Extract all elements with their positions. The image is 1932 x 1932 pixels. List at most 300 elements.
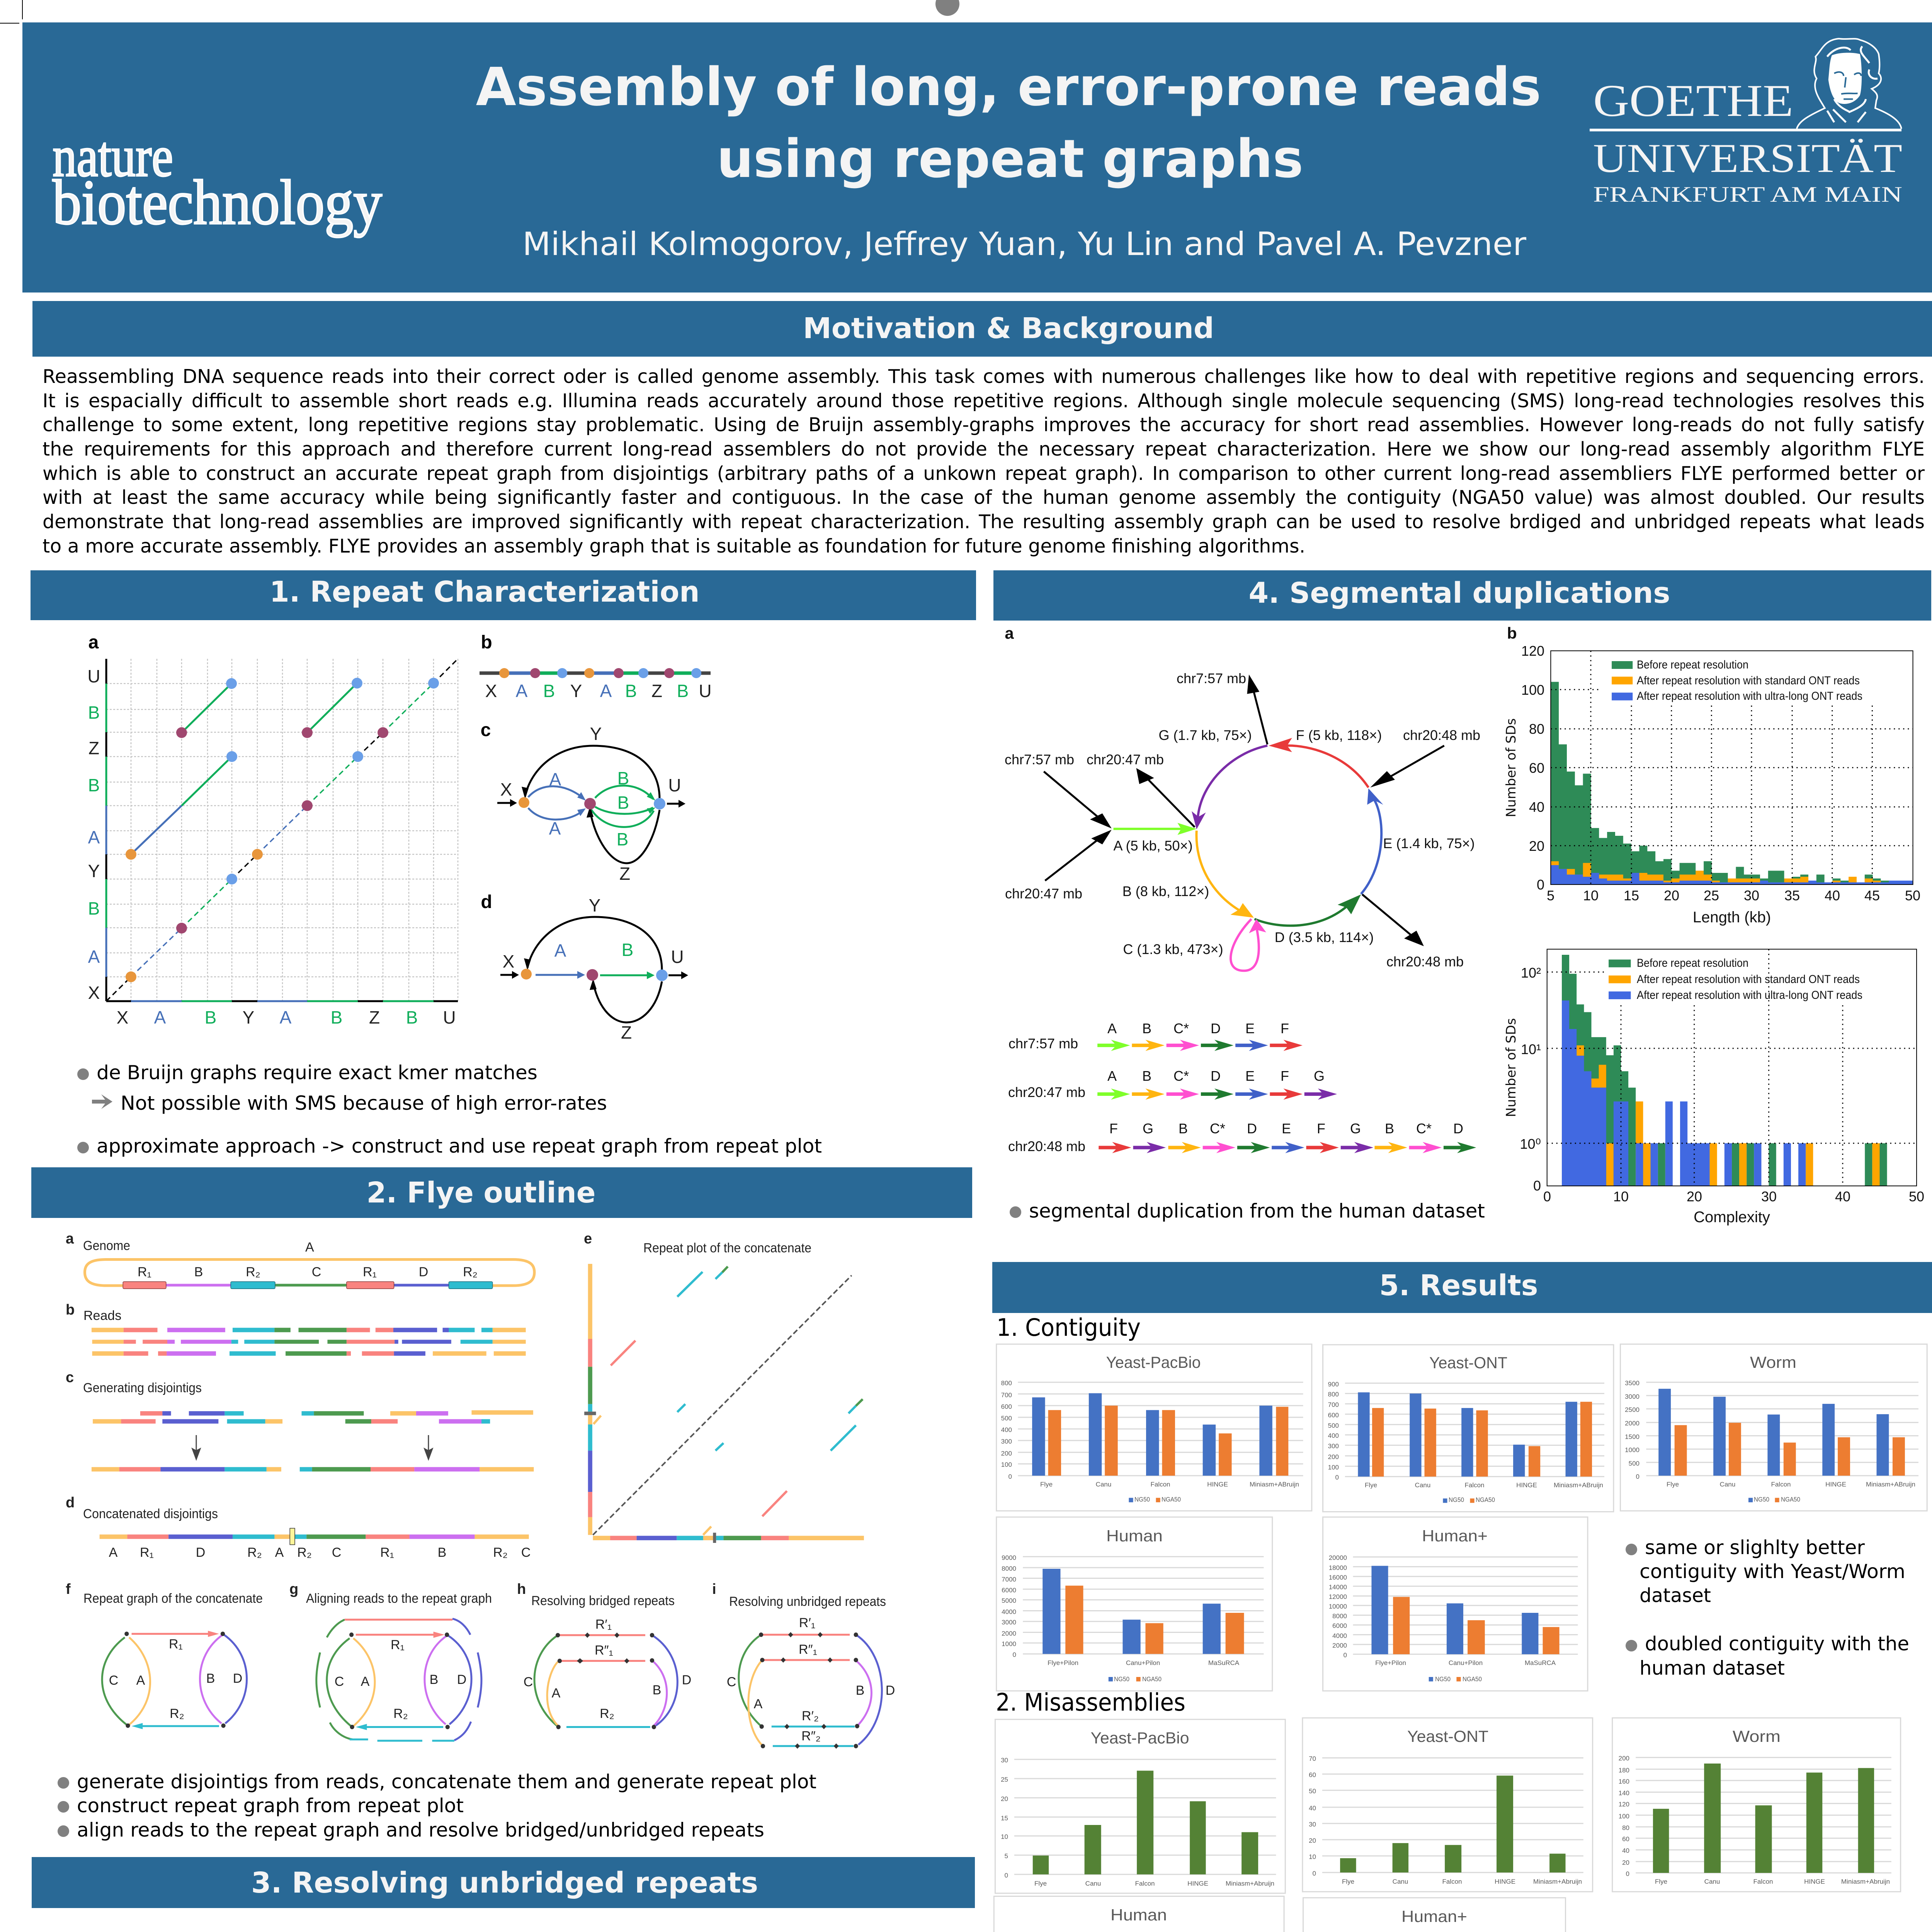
chart: contiguity yeast-pacbio: NGA50: [1162, 1496, 1181, 1503]
diagram: repeat graph c: B: [617, 829, 628, 849]
diagram: segmental duplication circle a: B: [1142, 1068, 1151, 1084]
diagram: segmental duplication circle a: E: [1245, 1068, 1255, 1084]
chart: contiguity human plus: Human+: [1422, 1527, 1488, 1545]
chart: contiguity human plus: 14000: [1329, 1583, 1347, 1591]
chart: misassemblies yeast-ont: 70: [1309, 1755, 1316, 1762]
chart: histogram length: 35: [1784, 888, 1800, 903]
chart: repeat plot a: Z: [369, 1007, 380, 1027]
panel: 5. results: [992, 1262, 1932, 1932]
diagram: genome, reads, disjointigs: R₂: [247, 1545, 262, 1560]
chart: histogram length: 10: [1583, 888, 1599, 903]
chart: misassemblies yeast-ont: Falcon: [1442, 1878, 1462, 1885]
diagram: linear genome b: Y: [570, 681, 582, 701]
chart: contiguity human plus: 12000: [1329, 1593, 1347, 1600]
diagram: genome, reads, disjointigs: R₂: [463, 1265, 478, 1279]
subheading: misassemblies: 2. Misassemblies: [996, 1688, 1185, 1716]
diagram: repeat graph d: [481, 892, 688, 1043]
diagram: genome, reads, disjointigs: c: [66, 1369, 74, 1386]
logo: Goethe Universitaet: [1590, 39, 1902, 207]
text block: to a more accurate assembly. FLYE provides an assembly graph that is suitable as foundation for future genome finishing algorithms.: [43, 535, 1305, 557]
chart: contiguity yeast-ont: 500: [1328, 1422, 1339, 1429]
chart: contiguity worm: 3500: [1625, 1379, 1639, 1387]
diagram: segmental duplication circle a: F: [1281, 1020, 1289, 1036]
chart: misassemblies worm: Flye: [1655, 1878, 1667, 1885]
chart: contiguity yeast-pacbio: Miniasm+ABruijn: [1250, 1481, 1299, 1488]
chart: histogram complexity: Complexity: [1694, 1209, 1770, 1226]
diagram: genome, reads, disjointigs: b: [66, 1302, 75, 1318]
chart: misassemblies yeast-pacbio: 10: [1001, 1833, 1008, 1840]
chart: contiguity yeast-pacbio: Falcon: [1150, 1481, 1170, 1488]
diagram: segmental duplication circle a: D (3.5 kb, 114×): [1275, 929, 1374, 945]
chart: misassemblies yeast-ont: 30: [1309, 1821, 1316, 1828]
diagram: alignment graph g: A: [361, 1674, 370, 1689]
bullets: contiguity: doubled contiguity with the: [1645, 1633, 1909, 1655]
chart: contiguity yeast-pacbio: Canu: [1096, 1481, 1111, 1488]
chart: repeat plot a: A: [280, 1007, 292, 1027]
diagram: repeat graph c: B: [617, 768, 629, 788]
diagram: unbridged repeats i: i: [712, 1581, 716, 1597]
diagram: alignment graph g: R₁: [391, 1638, 405, 1652]
chart: contiguity human plus: Flye+Pilon: [1375, 1659, 1406, 1667]
diagram: linear genome b: [480, 632, 712, 701]
diagram: repeat graph f: R₁: [169, 1637, 183, 1651]
diagram: unbridged repeats i: C: [727, 1675, 736, 1689]
chart: repeat plot a: Y: [243, 1007, 254, 1027]
chart: misassemblies worm: 180: [1619, 1767, 1629, 1774]
chart: histogram length: 0: [1537, 877, 1544, 893]
chart: misassemblies yeast-pacbio: 30: [1001, 1757, 1008, 1764]
chart: contiguity yeast-pacbio: 700: [1001, 1391, 1012, 1399]
diagram: unbridged repeats i: B: [856, 1683, 864, 1698]
chart: misassemblies worm: 60: [1622, 1835, 1629, 1843]
chart: contiguity yeast-ont: NGA50: [1476, 1496, 1495, 1503]
chart: repeat plot a: X: [117, 1007, 128, 1027]
chart: histogram complexity: 40: [1835, 1189, 1850, 1204]
chart: histogram length: 80: [1529, 721, 1544, 737]
diagram: linear genome b: B: [625, 681, 637, 701]
heading: 4. Segmental duplications: [1249, 577, 1670, 610]
diagram: repeat graph d: B: [622, 940, 633, 960]
chart: contiguity yeast-pacbio: 300: [1001, 1438, 1012, 1445]
diagram: unbridged repeats i: R′₁: [799, 1616, 815, 1630]
chart: contiguity human plus: 2000: [1332, 1642, 1347, 1649]
chart: contiguity yeast-ont: [1323, 1345, 1614, 1512]
diagram: segmental duplication circle a: chr20:47 mb: [1005, 886, 1082, 901]
diagram: genome, reads, disjointigs: R₁: [363, 1265, 377, 1279]
chart: histogram length: 40: [1825, 888, 1840, 903]
diagram: repeat graph f: A: [136, 1673, 145, 1688]
text block: [43, 365, 1925, 562]
bullets: Not possible with SMS because of high error-rates: [121, 1092, 607, 1114]
diagram: segmental duplication circle a: G: [1143, 1121, 1153, 1136]
chart: misassemblies worm: 160: [1619, 1778, 1629, 1785]
diagram: unbridged repeats i: R″₂: [801, 1729, 821, 1743]
chart: contiguity worm: 1000: [1625, 1446, 1639, 1454]
diagram: bridged repeats h: A: [552, 1686, 561, 1701]
chart: contiguity human plus: [1323, 1517, 1588, 1691]
chart: histogram complexity: 10¹: [1521, 1041, 1541, 1057]
diagram: repeat graph f: f: [66, 1581, 71, 1597]
diagram: repeat graph f: [66, 1581, 263, 1729]
bullets: [77, 1061, 822, 1157]
diagram: segmental duplication circle a: C*: [1173, 1020, 1189, 1036]
chart: histogram complexity: After repeat resolution with ultra-long ONT reads: [1637, 989, 1862, 1002]
chart: misassemblies worm: 40: [1622, 1847, 1629, 1854]
chart: repeat plot a: B: [406, 1007, 418, 1027]
chart: contiguity worm: NG50: [1754, 1496, 1769, 1503]
diagram: genome, reads, disjointigs: C: [332, 1545, 341, 1560]
panel: motivation and background: [32, 301, 1932, 562]
chart: misassemblies worm: 80: [1622, 1824, 1629, 1832]
chart: repeat plot a: B: [331, 1007, 342, 1027]
chart: contiguity yeast-pacbio: 100: [1001, 1461, 1012, 1468]
chart: repeat plot a: B: [88, 898, 100, 918]
chart: misassemblies human plus: Human+: [1401, 1907, 1467, 1925]
diagram: segmental duplication circle a: C*: [1210, 1121, 1225, 1136]
diagram: linear genome b: B: [677, 681, 689, 701]
diagram: unbridged repeats i: R″₁: [799, 1642, 817, 1657]
text block: the requirements for this approach and therefore current long-read assemblers do not provide the necessary repeat characterization. Here we show our long-read assembly algorithm FLYE: [43, 438, 1925, 460]
chart: misassemblies worm: 200: [1619, 1755, 1629, 1762]
chart: contiguity human: [997, 1517, 1272, 1691]
chart: histogram length: 120: [1521, 643, 1544, 659]
chart: repeat plot a: a: [88, 632, 99, 653]
chart: histogram length: b: [1507, 624, 1517, 642]
chart: histogram length: Number of SDs: [1503, 718, 1519, 817]
diagram: genome, reads, disjointigs: Concatenated disjointigs: [83, 1507, 218, 1521]
chart: contiguity worm: 2000: [1625, 1420, 1639, 1427]
diagram: linear genome b: U: [699, 681, 712, 701]
diagram: bridged repeats h: h: [517, 1581, 526, 1597]
diagram: bridged repeats h: B: [653, 1683, 661, 1697]
chart: contiguity human plus: 20000: [1329, 1554, 1347, 1561]
diagram: genome, reads, disjointigs: Reads: [83, 1308, 121, 1323]
header band: [22, 22, 1932, 293]
chart: contiguity human: 0: [1013, 1651, 1016, 1658]
diagram: segmental duplication circle a: A (5 kb, 50×): [1113, 838, 1193, 854]
chart: misassemblies yeast-ont: 60: [1309, 1771, 1316, 1779]
diagram: repeat graph c: X: [500, 779, 512, 799]
diagram: unbridged repeats i: D: [886, 1683, 895, 1698]
diagram: alignment graph g: Aligning reads to the repeat graph: [306, 1591, 492, 1606]
chart: contiguity yeast-ont: 800: [1328, 1391, 1339, 1398]
logo: Goethe Universitaet: GOETHE: [1593, 75, 1793, 126]
diagram: segmental duplication circle a: A: [1107, 1020, 1117, 1036]
chart: repeat plot a: U: [443, 1007, 456, 1027]
diagram: segmental duplication circle a: E (1.4 kb, 75×): [1383, 835, 1475, 851]
bullets: contiguity: human dataset: [1639, 1657, 1785, 1679]
chart: repeat plot e: [584, 1231, 864, 1543]
text block: It is espacially difficult to assemble short reads e.g. Illumina reads accurately around those repetitive regions. Although single molecule sequencing (SMS) long-read technologies resolves this: [43, 390, 1925, 412]
title: using repeat graphs: [717, 129, 1303, 190]
diagram: genome, reads, disjointigs: B: [438, 1545, 446, 1560]
diagram: repeat graph c: Z: [619, 864, 630, 884]
chart: contiguity human plus: 10000: [1329, 1603, 1347, 1610]
text block: demonstrate that long-read assemblies are improved significantly with repeat characterization. The resulting assembly graph can be used to resolve brdiged and unbridged repeats what leads: [43, 511, 1925, 533]
chart: contiguity human plus: NGA50: [1463, 1675, 1482, 1683]
diagram: bridged repeats h: Resolving bridged repeats: [531, 1594, 675, 1608]
chart: misassemblies yeast-ont: 40: [1309, 1804, 1316, 1812]
chart: contiguity human: 3000: [1002, 1619, 1016, 1626]
chart: contiguity yeast-pacbio: 400: [1001, 1426, 1012, 1434]
chart: misassemblies yeast-ont: Miniasm+Abruijn: [1533, 1878, 1582, 1885]
chart: repeat plot e: Repeat plot of the concatenate: [643, 1241, 811, 1255]
diagram: segmental duplication circle a: D: [1211, 1068, 1221, 1084]
diagram: repeat graph c: Y: [590, 724, 602, 744]
chart: contiguity worm: Canu: [1720, 1481, 1735, 1488]
diagram: linear genome b: A: [516, 681, 528, 701]
diagram: unbridged repeats i: R′₂: [802, 1709, 819, 1723]
chart: contiguity worm: Miniasm+ABruijn: [1866, 1481, 1915, 1488]
chart: histogram length: 15: [1624, 888, 1639, 903]
logo: nature biotechnology: [53, 124, 382, 238]
chart: repeat plot a: A: [154, 1007, 166, 1027]
chart: contiguity yeast-pacbio: NG50: [1134, 1496, 1150, 1503]
chart: misassemblies yeast-ont: 0: [1313, 1870, 1316, 1877]
chart: contiguity human plus: 8000: [1332, 1612, 1347, 1620]
chart: contiguity human: 1000: [1002, 1640, 1016, 1648]
diagram: genome, reads, disjointigs: C: [312, 1265, 321, 1279]
chart: histogram complexity: 10²: [1521, 965, 1541, 981]
chart: contiguity human: Human: [1106, 1527, 1163, 1545]
chart: contiguity yeast-ont: 100: [1328, 1464, 1339, 1471]
diagram: segmental duplication circle a: D: [1211, 1020, 1221, 1036]
chart: misassemblies yeast-pacbio: Falcon: [1135, 1880, 1155, 1887]
panel: 4. segmental duplications: [993, 570, 1931, 1226]
chart: contiguity human: 6000: [1002, 1587, 1016, 1594]
chart: contiguity yeast-pacbio: 800: [1001, 1379, 1012, 1387]
diagram: unbridged repeats i: Resolving unbridged repeats: [729, 1594, 886, 1609]
authors: Mikhail Kolmogorov, Jeffrey Yuan, Yu Lin and Pavel A. Pevzner: [522, 225, 1527, 263]
chart: histogram length: 25: [1704, 888, 1719, 903]
diagram: segmental duplication circle a: E: [1245, 1020, 1255, 1036]
bullets: contiguity: same or slighlty better: [1645, 1536, 1865, 1559]
chart: contiguity yeast-ont: Yeast-ONT: [1429, 1354, 1507, 1372]
bullets: construct repeat graph from repeat plot: [77, 1794, 464, 1817]
chart: misassemblies yeast-pacbio: 0: [1005, 1872, 1008, 1879]
diagram: segmental duplication circle a: chr20:48 mb: [1008, 1138, 1085, 1154]
diagram: bridged repeats h: [517, 1581, 691, 1729]
diagram: genome, reads, disjointigs: R₁: [140, 1545, 154, 1560]
diagram: genome, reads, disjointigs: R₂: [493, 1545, 508, 1560]
text block: with at least the same accuracy while being significantly faster and contiguous. In the case of the human genome assembly the contiguity (NGA50 value) was almost doubled. Our results: [43, 486, 1925, 509]
chart: histogram complexity: [1503, 949, 1924, 1226]
diagram: genome, reads, disjointigs: D: [196, 1545, 205, 1560]
diagram: repeat graph d: Y: [589, 895, 600, 915]
chart: contiguity human plus: 6000: [1332, 1622, 1347, 1629]
chart: misassemblies worm: 20: [1622, 1859, 1629, 1866]
diagram: alignment graph g: [289, 1581, 492, 1741]
chart: misassemblies worm: Worm: [1733, 1727, 1781, 1745]
diagram: genome, reads, disjointigs: R₂: [297, 1545, 312, 1560]
chart: repeat plot a: U: [87, 666, 100, 686]
chart: repeat plot a: A: [88, 827, 100, 847]
diagram: segmental duplication circle a: chr7:57 mb: [1177, 670, 1246, 686]
chart: contiguity yeast-pacbio: 200: [1001, 1450, 1012, 1457]
diagram: genome, reads, disjointigs: D: [419, 1265, 428, 1279]
diagram: repeat graph c: c: [481, 720, 491, 740]
chart: histogram complexity: Before repeat resolution: [1637, 957, 1748, 969]
diagram: genome, reads, disjointigs: Genome: [83, 1238, 130, 1253]
diagram: segmental duplication circle a: G: [1350, 1121, 1361, 1136]
chart: histogram complexity: 30: [1761, 1189, 1777, 1204]
chart: repeat plot a: A: [88, 947, 100, 967]
chart: misassemblies worm: 120: [1619, 1801, 1629, 1808]
diagram: segmental duplication circle a: C (1.3 kb, 473×): [1123, 941, 1223, 957]
chart: contiguity yeast-pacbio: HINGE: [1207, 1481, 1228, 1488]
chart: histogram length: Before repeat resolution: [1637, 658, 1748, 671]
chart: misassemblies yeast-ont: 50: [1309, 1787, 1316, 1795]
diagram: repeat graph f: C: [109, 1673, 118, 1688]
logo: Goethe Universitaet: FRANKFURT AM MAIN: [1593, 182, 1902, 207]
chart: contiguity worm: HINGE: [1825, 1481, 1846, 1488]
chart: contiguity yeast-ont: 700: [1328, 1401, 1339, 1408]
chart: misassemblies worm: 140: [1619, 1789, 1629, 1797]
chart: misassemblies worm: Miniasm+Abruijn: [1841, 1878, 1890, 1885]
diagram: bridged repeats h: R₂: [600, 1706, 614, 1721]
chart: repeat plot a: [87, 632, 458, 1027]
chart: contiguity human plus: Canu+Pilon: [1449, 1659, 1483, 1667]
diagram: repeat graph d: Z: [621, 1022, 632, 1043]
logo: nature biotechnology: biotechnology: [53, 167, 382, 238]
chart: misassemblies worm: [1612, 1718, 1901, 1892]
bullets: align reads to the repeat graph and resolve bridged/unbridged repeats: [77, 1819, 764, 1841]
chart: contiguity human plus: 18000: [1329, 1564, 1347, 1571]
chart: contiguity human: MaSuRCA: [1208, 1659, 1240, 1667]
diagram: segmental duplication circle a: B: [1142, 1020, 1151, 1036]
chart: contiguity human: 2000: [1002, 1630, 1016, 1637]
chart: repeat plot a: X: [88, 983, 100, 1003]
bullets: de Bruijn graphs require exact kmer matches: [97, 1061, 537, 1084]
chart: contiguity worm: Flye: [1667, 1481, 1679, 1488]
chart: repeat plot a: B: [205, 1007, 216, 1027]
diagram: genome, reads, disjointigs: C: [521, 1545, 531, 1560]
diagram: repeat graph c: U: [668, 775, 681, 795]
chart: misassemblies yeast-pacbio: Canu: [1085, 1880, 1101, 1887]
diagram: alignment graph g: R₂: [393, 1706, 408, 1721]
diagram: genome, reads, disjointigs: A: [305, 1240, 314, 1255]
chart: misassemblies worm: Canu: [1704, 1878, 1720, 1885]
diagram: repeat graph f: R₂: [170, 1706, 184, 1721]
diagram: bridged repeats h: D: [682, 1673, 691, 1687]
chart: contiguity yeast-ont: 0: [1335, 1474, 1339, 1481]
chart: histogram complexity: 20: [1687, 1189, 1702, 1204]
chart: misassemblies worm: HINGE: [1804, 1878, 1825, 1885]
diagram: unbridged repeats i: A: [754, 1697, 763, 1711]
subheading: contiguity: 1. Contiguity: [997, 1313, 1141, 1342]
chart: contiguity yeast-pacbio: 500: [1001, 1415, 1012, 1422]
chart: misassemblies yeast-ont: Yeast-ONT: [1407, 1727, 1488, 1745]
chart: contiguity yeast-ont: NG50: [1449, 1496, 1464, 1503]
chart: contiguity yeast-ont: 200: [1328, 1453, 1339, 1461]
bullets: contiguity: dataset: [1639, 1584, 1711, 1607]
chart: misassemblies yeast-pacbio: 5: [1005, 1852, 1008, 1860]
diagram: segmental duplication circle a: G: [1314, 1068, 1325, 1084]
chart: misassemblies yeast-ont: 20: [1309, 1837, 1316, 1844]
diagram: linear genome b: A: [600, 681, 612, 701]
diagram: genome, reads, disjointigs: A: [275, 1545, 284, 1560]
chart: misassemblies human: Human: [1111, 1906, 1167, 1924]
chart: misassemblies yeast-ont: Flye: [1342, 1878, 1354, 1885]
chart: misassemblies yeast-ont: Canu: [1393, 1878, 1408, 1885]
chart: repeat plot a: Z: [88, 738, 99, 758]
diagram: segmental duplication circle a: D: [1453, 1121, 1463, 1136]
chart: histogram length: 20: [1529, 838, 1544, 854]
diagram: segmental duplication circle a: B: [1385, 1121, 1394, 1136]
chart: contiguity worm: 1500: [1625, 1433, 1639, 1440]
chart: histogram complexity: 10: [1613, 1189, 1629, 1204]
title: Assembly of long, error-prone reads: [476, 57, 1541, 118]
chart: contiguity yeast-ont: 900: [1328, 1381, 1339, 1388]
diagram: genome, reads, disjointigs: A: [109, 1545, 118, 1560]
diagram: alignment graph g: g: [289, 1581, 298, 1597]
diagram: genome, reads, disjointigs: R₁: [138, 1265, 151, 1279]
chart: contiguity yeast-ont: Miniasm+ABruijn: [1554, 1481, 1603, 1489]
chart: misassemblies yeast-pacbio: HINGE: [1187, 1880, 1208, 1887]
heading: 5. Results: [1379, 1269, 1538, 1302]
chart: contiguity yeast-pacbio: Flye: [1040, 1481, 1053, 1488]
chart: contiguity human plus: 4000: [1332, 1632, 1347, 1639]
diagram: bridged repeats h: R′₁: [595, 1617, 612, 1632]
diagram: alignment graph g: C: [335, 1674, 344, 1689]
heading: 1. Repeat Characterization: [270, 575, 699, 609]
diagram: alignment graph g: D: [457, 1672, 466, 1687]
diagram: segmental duplication circle a: chr20:48 mb: [1403, 727, 1480, 743]
bullets: [58, 1770, 816, 1841]
chart: histogram length: 40: [1529, 799, 1544, 815]
diagram: alignment graph g: B: [430, 1672, 438, 1687]
logo: nature biotechnology: nature: [53, 124, 173, 189]
chart: contiguity yeast-pacbio: Yeast-PacBio: [1106, 1353, 1201, 1371]
diagram: segmental duplication circle a: G (1.7 kb, 75×): [1158, 727, 1252, 743]
diagram: bridged repeats h: R″₁: [595, 1643, 613, 1658]
chart: misassemblies yeast-pacbio: [995, 1719, 1285, 1893]
chart: contiguity yeast-ont: 600: [1328, 1412, 1339, 1419]
diagram: genome, reads, disjointigs: d: [66, 1495, 75, 1511]
chart: contiguity human: 4000: [1002, 1608, 1016, 1616]
panel: 3. resolving unbridged repeats: [32, 1857, 975, 1932]
chart: repeat plot a: B: [88, 702, 100, 723]
chart: misassemblies yeast-pacbio: Miniasm+Abruijn: [1226, 1880, 1274, 1887]
chart: contiguity human: NG50: [1114, 1675, 1129, 1683]
chart: histogram complexity: 0: [1533, 1178, 1541, 1194]
chart: histogram complexity: 10⁰: [1520, 1136, 1541, 1152]
diagram: segmental duplication circle a: chr20:48 mb: [1386, 954, 1464, 969]
diagram: segmental duplication circle a: B (8 kb, 112×): [1122, 883, 1209, 899]
bullets: contiguity: [1626, 1536, 1909, 1679]
text block: which is able to construct an accurate repeat graph from disjointigs (arbitrary paths of a unkown repeat graph). In comparison to other current long-read assembliers FLYE performed better or: [43, 463, 1925, 485]
chart: contiguity human: 8000: [1002, 1565, 1016, 1572]
diagram: repeat graph c: A: [549, 818, 561, 838]
chart: repeat plot a: B: [88, 775, 100, 795]
panel: 1. repeat characterization: [31, 570, 976, 1157]
diagram: genome, reads, disjointigs: a: [66, 1231, 74, 1247]
chart: histogram length: After repeat resolution with standard ONT reads: [1637, 674, 1860, 687]
chart: histogram length: 5: [1547, 888, 1554, 903]
bullets: contiguity: contiguity with Yeast/Worm: [1639, 1560, 1905, 1583]
text block: challenge to some extent, long repetitive regions stay problematic. Using de Bruijn assembly-graphs improves the accuracy for short read assemblies. However long-reads do not fully satisfy: [43, 414, 1925, 436]
diagram: segmental duplication circle a: C*: [1173, 1068, 1189, 1084]
chart: repeat plot a: Y: [88, 861, 100, 881]
diagram: linear genome b: Z: [651, 681, 662, 701]
logo: Goethe Universitaet: UNIVERSITÄT: [1593, 136, 1902, 181]
diagram: segmental duplication circle a: chr7:57 mb: [1005, 752, 1074, 767]
diagram: repeat graph c: [481, 720, 685, 884]
chart: contiguity worm: 2500: [1625, 1406, 1639, 1413]
chart: histogram length: 20: [1664, 888, 1679, 903]
heading: Motivation & Background: [803, 312, 1214, 345]
diagram: segmental duplication circle a: F (5 kb, 118×): [1296, 727, 1382, 743]
